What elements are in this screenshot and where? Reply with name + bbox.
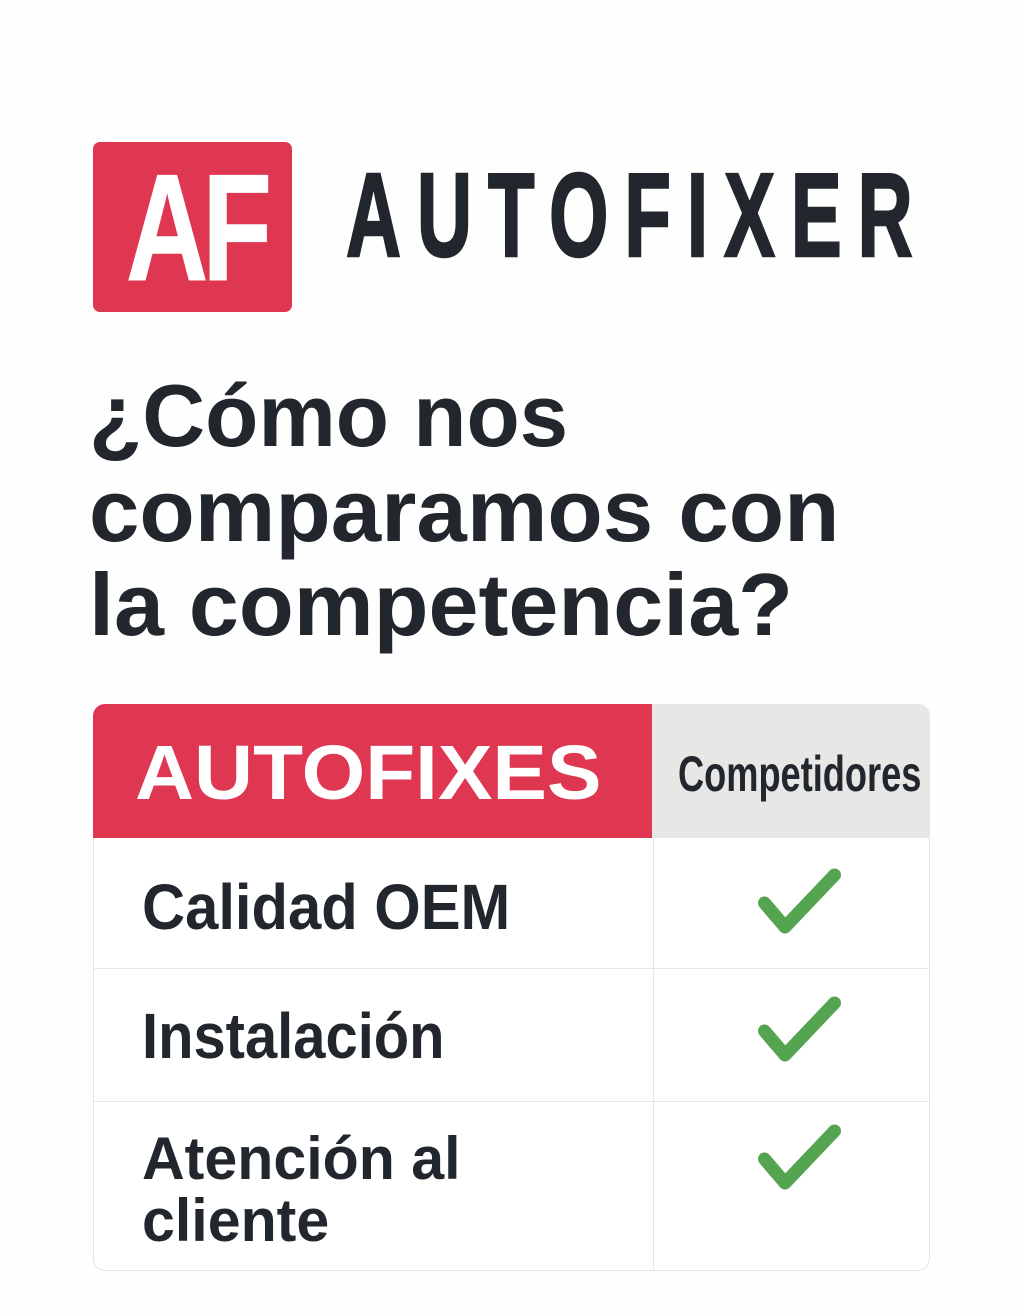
header label Competidores: Competidores	[678, 746, 921, 802]
header: Competidores	[652, 704, 930, 838]
icon: check row 2	[758, 996, 841, 1062]
table outline	[93, 704, 930, 1271]
column divider	[653, 838, 654, 1271]
title: la competencia?	[89, 555, 793, 654]
row label: Atención al cliente: Atención al	[142, 1125, 461, 1192]
title	[89, 366, 840, 654]
header label AUTOFIXES: AUTOFIXES	[135, 730, 602, 816]
row divider 1	[93, 968, 930, 969]
title: ¿Cómo nos	[89, 366, 568, 465]
row label: Calidad OEM: Calidad OEM	[142, 871, 510, 943]
comparison table	[93, 704, 930, 1271]
row label: Atención al cliente: cliente	[142, 1187, 329, 1254]
header: AUTOFIXES	[93, 704, 652, 838]
row divider 2	[93, 1101, 930, 1102]
logo badge	[93, 142, 292, 312]
icon: check row 1	[758, 868, 841, 934]
row label: Atención al cliente	[142, 1125, 461, 1254]
title: comparamos con	[89, 460, 840, 560]
logo letters AF: AF	[126, 143, 266, 312]
brand name: AUTOFIXER	[346, 149, 929, 282]
row label: Instalación: Instalación	[142, 1000, 445, 1072]
icon: check row 3	[758, 1124, 841, 1190]
